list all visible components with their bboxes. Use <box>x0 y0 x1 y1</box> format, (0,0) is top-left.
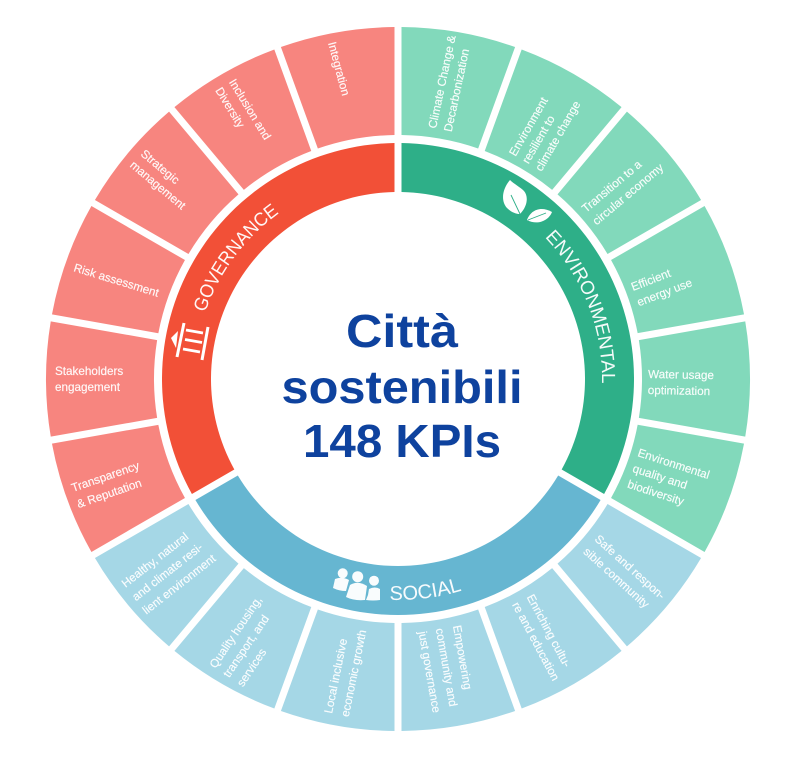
label: SOCIAL: SOCIAL <box>390 579 462 600</box>
segment: Quality housing, transport, and services <box>168 556 316 709</box>
segment: Safe and responsible community: sible community <box>581 545 652 611</box>
ring: social <box>196 476 600 615</box>
segment: Water usage optimization: optimization <box>648 384 710 398</box>
segment: Transparency & Reputation <box>35 393 197 552</box>
segment: Transition to a circular economy: Transition to a <box>580 158 644 215</box>
title: 148 KPIs <box>303 415 501 467</box>
segment: Local inclusive economic growth: Local inclusive <box>322 638 350 715</box>
segment: Environmental quality and biodiversity: biodiversity <box>626 478 686 508</box>
title: Città <box>346 305 458 357</box>
segment: Environment resilient to climate change: Environment <box>507 95 551 158</box>
segment: Strategic management: management <box>127 159 189 213</box>
icon: people <box>333 568 380 600</box>
ring: governance <box>162 143 394 494</box>
segment: Strategic management <box>95 102 257 261</box>
segment: Climate Change & Decarbonization: Decarbonization <box>442 48 472 133</box>
panel: environmental outer segments <box>402 27 765 555</box>
segment: Climate Change & Decarbonization: Climate Change & <box>426 34 459 130</box>
panel: social outer segments <box>82 480 701 750</box>
segment: Integration: Integration <box>325 40 352 97</box>
segment: Healthy, natural and climate resilient environment <box>82 480 247 646</box>
segment: Climate Change & Decarbonization <box>402 27 515 149</box>
segment: Safe and responsible community: Safe and respon- <box>592 533 667 602</box>
segment: Stakeholders engagement <box>31 304 170 437</box>
segment: Inclusion and Diversity: Diversity <box>212 85 247 130</box>
segment: Environmental quality and biodiversity: Environmental <box>636 446 711 482</box>
segment: Transparency & Reputation: & Reputation <box>75 477 143 511</box>
segment: Enriching culture and education: re and education <box>509 600 562 683</box>
segment: Environment resilient to climate change <box>480 49 628 202</box>
segment: Empowering community and just governance: community and <box>433 627 459 708</box>
segment: Environment resilient to climate change: resilient to <box>520 113 558 166</box>
segment: Environment resilient to climate change: climate change <box>533 99 583 174</box>
segment: Empowering community and just governance: Empowering <box>450 624 474 691</box>
segment: Local inclusive economic growth <box>281 609 394 731</box>
segment: Integration <box>281 8 429 161</box>
title: sostenibili <box>282 361 522 413</box>
segment: Water usage optimization <box>626 321 765 454</box>
segment: Environmental quality and biodiversity: quality and <box>631 462 689 492</box>
segment: Safe and responsible community <box>539 497 701 656</box>
segment: Efficient energy use: Efficient <box>629 267 673 294</box>
segment: Inclusion and Diversity: Inclusion and <box>226 77 273 142</box>
segment: Enriching culture and education: Enriching cultu- <box>524 592 573 670</box>
segment: Transition to a circular economy: circular economy <box>590 161 666 228</box>
segment: Strategic management: Strategic <box>138 147 182 187</box>
segment: Healthy, natural and climate resilient environment: Healthy, natural <box>119 530 191 590</box>
label: ENVIRONMENTAL: ENVIRONMENTAL <box>546 230 616 383</box>
segment: Inclusion and Diversity <box>174 34 340 200</box>
segment: Healthy, natural and climate resilient environment: and climate resi- <box>130 541 205 604</box>
segment: Quality housing, transport, and services: Quality housing, <box>207 594 265 671</box>
segment: Empowering community and just governance <box>367 597 515 750</box>
icon: leaves <box>503 180 552 222</box>
segment: Quality housing, transport, and services: transport, and <box>221 613 272 680</box>
segment: Water usage optimization: Water usage <box>648 368 714 382</box>
segment: Transparency & Reputation: Transparency <box>70 459 141 495</box>
segment: Efficient energy use <box>599 206 761 365</box>
label: GOVERNANCE: GOVERNANCE <box>194 203 278 310</box>
icon: temple <box>171 323 208 360</box>
segment: Healthy, natural and climate resilient environment: lient environment <box>140 552 219 617</box>
segment: Stakeholders engagement: Stakeholders <box>55 365 123 378</box>
segment: Enriching culture and education <box>456 558 622 724</box>
segment: Empowering community and just governance: just governance <box>415 629 443 714</box>
panel: governance outer segments <box>31 8 429 552</box>
segment: Transition to a circular economy <box>549 112 714 278</box>
title <box>282 305 522 467</box>
segment: Stakeholders engagement: engagement <box>55 381 121 394</box>
segment: Risk assessment: Risk assessment <box>72 261 161 300</box>
segment: Quality housing, transport, and services: services <box>235 646 269 689</box>
ring: environmental <box>402 143 634 494</box>
segment: Risk assessment <box>52 203 191 336</box>
segment: Local inclusive economic growth: economic growth <box>339 629 369 718</box>
segment: Efficient energy use: energy use <box>635 276 694 309</box>
segment: Environmental quality and biodiversity <box>605 422 744 555</box>
